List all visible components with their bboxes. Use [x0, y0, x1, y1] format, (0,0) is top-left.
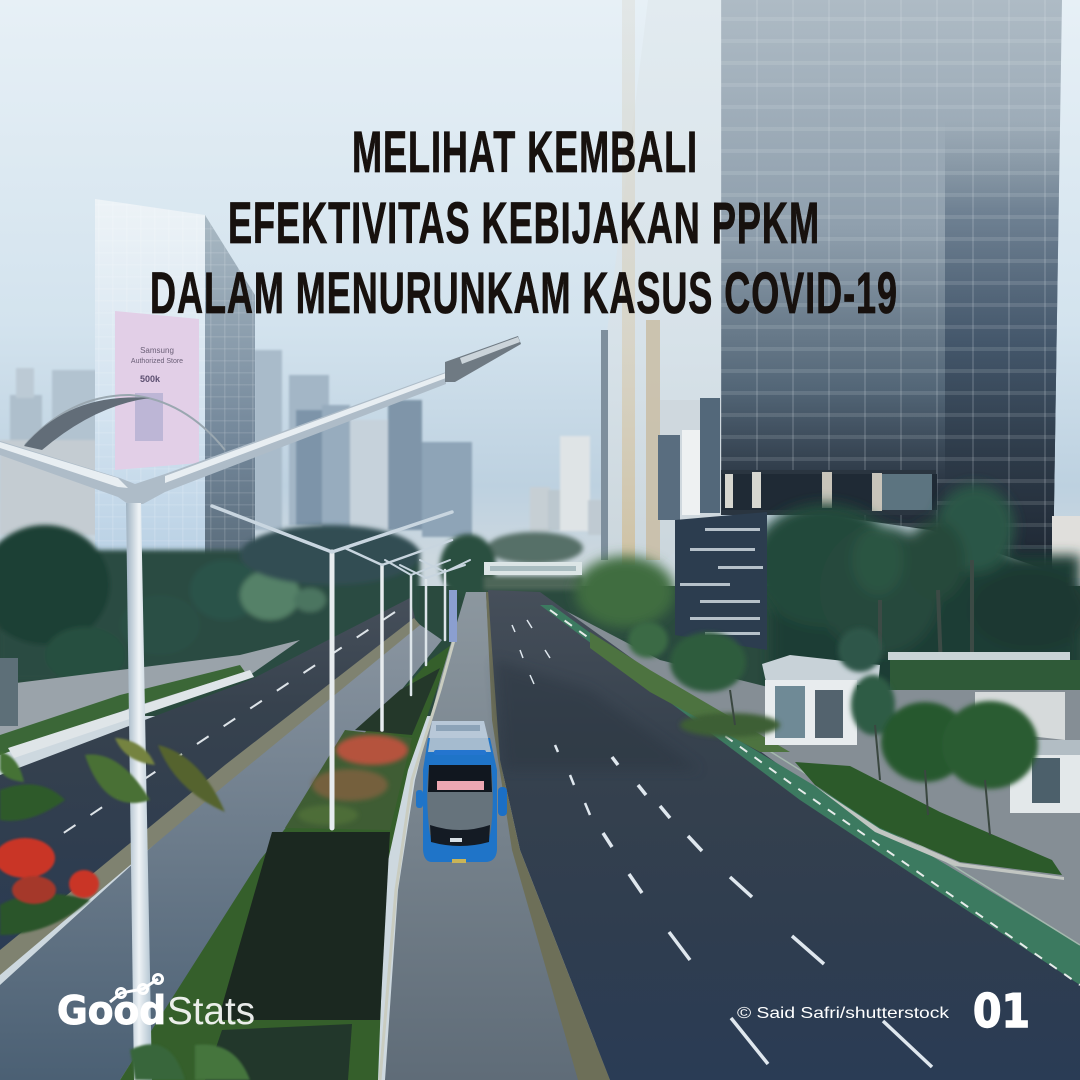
building: small far right	[1052, 516, 1080, 578]
ground under distant junction	[0, 586, 1080, 716]
windscreen	[427, 765, 493, 842]
title: MELIHAT KEMBALI	[352, 120, 698, 185]
median planting	[120, 640, 458, 1080]
left barrier	[0, 618, 420, 975]
bus stop: shelter right	[975, 692, 1080, 813]
right main road	[488, 590, 1080, 1080]
logo: GoodStats: Stats	[167, 990, 255, 1033]
building: beige structure beside tower	[601, 0, 722, 565]
street lamp small group	[212, 506, 470, 828]
green bike lane	[540, 605, 1080, 985]
left road lane dashes	[50, 612, 395, 842]
big street lamp	[0, 336, 521, 1080]
overpass bridge	[484, 562, 582, 575]
billboard: 500k	[140, 374, 161, 384]
page number: 01	[973, 984, 1030, 1038]
red flowers	[0, 838, 99, 904]
tree line: centre horizon	[440, 532, 584, 598]
right sidewalk and hedge	[590, 632, 1064, 880]
dark hedge	[218, 832, 390, 1020]
tree mass: right side	[575, 484, 1080, 690]
roadside trees	[628, 622, 1038, 789]
destination sign	[437, 781, 484, 790]
billboard	[115, 311, 199, 470]
left main road	[0, 598, 416, 960]
bus	[416, 721, 507, 863]
left sidewalk and planting	[0, 640, 300, 758]
ground base right	[545, 600, 1080, 1080]
building: right glass tower	[721, 0, 1062, 572]
title	[150, 120, 898, 326]
banner on median	[449, 590, 457, 642]
logo icon	[110, 974, 162, 1002]
right road lane dashes	[512, 620, 932, 1067]
building: dark striped block	[675, 512, 767, 650]
shadow bands	[495, 660, 700, 770]
tree mass: left side	[0, 525, 420, 683]
busway kerb left	[380, 640, 454, 1080]
building: left tower with billboard	[95, 199, 255, 590]
billboard: Samsung	[140, 346, 174, 355]
foreground foliage	[0, 738, 250, 1080]
busway kerb right	[486, 592, 610, 1080]
busway lane	[385, 592, 580, 1080]
light strip behind trees	[888, 652, 1070, 660]
photo credit: © Said Safri/shutterstock	[737, 1005, 950, 1022]
flower bed	[285, 730, 412, 830]
logo: GoodStats: Good	[57, 989, 166, 1034]
logo: GoodStats	[57, 974, 255, 1034]
trunks of palms	[880, 560, 972, 695]
distant skyline	[0, 350, 602, 537]
billboard: Authorized Store	[131, 358, 183, 365]
bus stop: shelter centre	[762, 655, 880, 745]
mirrors	[416, 790, 423, 808]
left service road	[0, 622, 442, 1080]
